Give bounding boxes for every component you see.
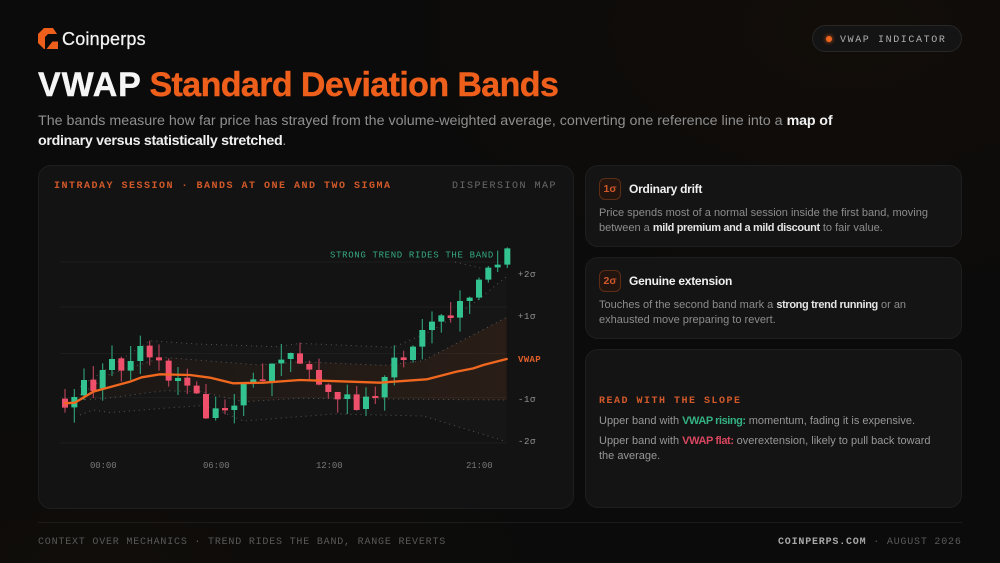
title: VWAP Standard Deviation Bands [38, 66, 558, 104]
badge 1 sigma [599, 178, 621, 200]
flat line: the average. [599, 450, 660, 462]
pill: VWAP indicator [812, 25, 962, 52]
footer left: CONTEXT OVER MECHANICS · TREND RIDES THE BAND, RANGE REVERTS [38, 537, 446, 548]
green candles [71, 247, 510, 423]
subtitle [38, 113, 833, 149]
chart tag: DISPERSION MAP [452, 181, 557, 192]
outer band fill [65, 277, 507, 442]
card text: between a mild premium and a mild discount to fair value. [599, 222, 883, 234]
time axis labels: 21:00 [466, 461, 493, 471]
callout: strong trend: STRONG TREND RIDES THE BAND [330, 250, 494, 260]
flat line [599, 435, 930, 462]
sigma labels: -1σ [518, 395, 536, 405]
VWAP line [65, 359, 507, 403]
badge 2 sigma [599, 270, 621, 292]
badge 2 sigma: 2σ [603, 275, 617, 287]
footer rule [38, 522, 962, 523]
card: genuine extension [585, 257, 962, 339]
sigma labels: -2σ [518, 437, 536, 447]
logo [38, 28, 146, 50]
card text [599, 207, 928, 234]
rising line: Upper band with VWAP rising: momentum, fading it is expensive. [599, 415, 915, 427]
time axis labels: 06:00 [203, 461, 230, 471]
subtitle: The bands measure how far price has strayed from the volume-weighted average, converting one reference line into a map of [38, 113, 832, 129]
card: read with the slope [585, 349, 962, 508]
red candles [62, 302, 454, 419]
card text: exhausted move preparing to revert. [599, 314, 776, 326]
card text: Touches of the second band mark a strong trend running or an [599, 299, 906, 311]
icon: status dot [826, 36, 832, 42]
inner band fill [65, 317, 507, 403]
panel: chart [38, 165, 574, 509]
sigma band lines [80, 262, 507, 442]
chart heading: INTRADAY SESSION · BANDS AT ONE AND TWO SIGMA [54, 181, 392, 192]
time axis labels: 00:00 [90, 461, 117, 471]
pill label: VWAP INDICATOR [840, 35, 946, 46]
time axis labels [90, 461, 493, 471]
card heading: Genuine extension [629, 274, 732, 288]
footer right: COINPERPS.COM · AUGUST 2026 [778, 537, 962, 548]
card heading: READ WITH THE SLOPE [599, 396, 742, 407]
time axis labels: 12:00 [316, 461, 343, 471]
card heading: Ordinary drift [629, 182, 702, 196]
card: ordinary drift [585, 165, 962, 247]
flat line: Upper band with VWAP flat: overextension, likely to pull back toward [599, 435, 930, 447]
sigma labels: +1σ [518, 312, 536, 322]
card text: Price spends most of a normal session inside the first band, moving [599, 207, 928, 219]
badge 1 sigma: 1σ [603, 183, 617, 195]
subtitle: ordinary versus statistically stretched. [38, 133, 286, 149]
card text [599, 299, 906, 326]
brand name: Coinperps [62, 29, 146, 49]
icon: logo mark [38, 28, 58, 49]
sigma labels: VWAP [518, 355, 541, 365]
sigma labels [518, 270, 541, 447]
sigma labels: +2σ [518, 270, 536, 280]
